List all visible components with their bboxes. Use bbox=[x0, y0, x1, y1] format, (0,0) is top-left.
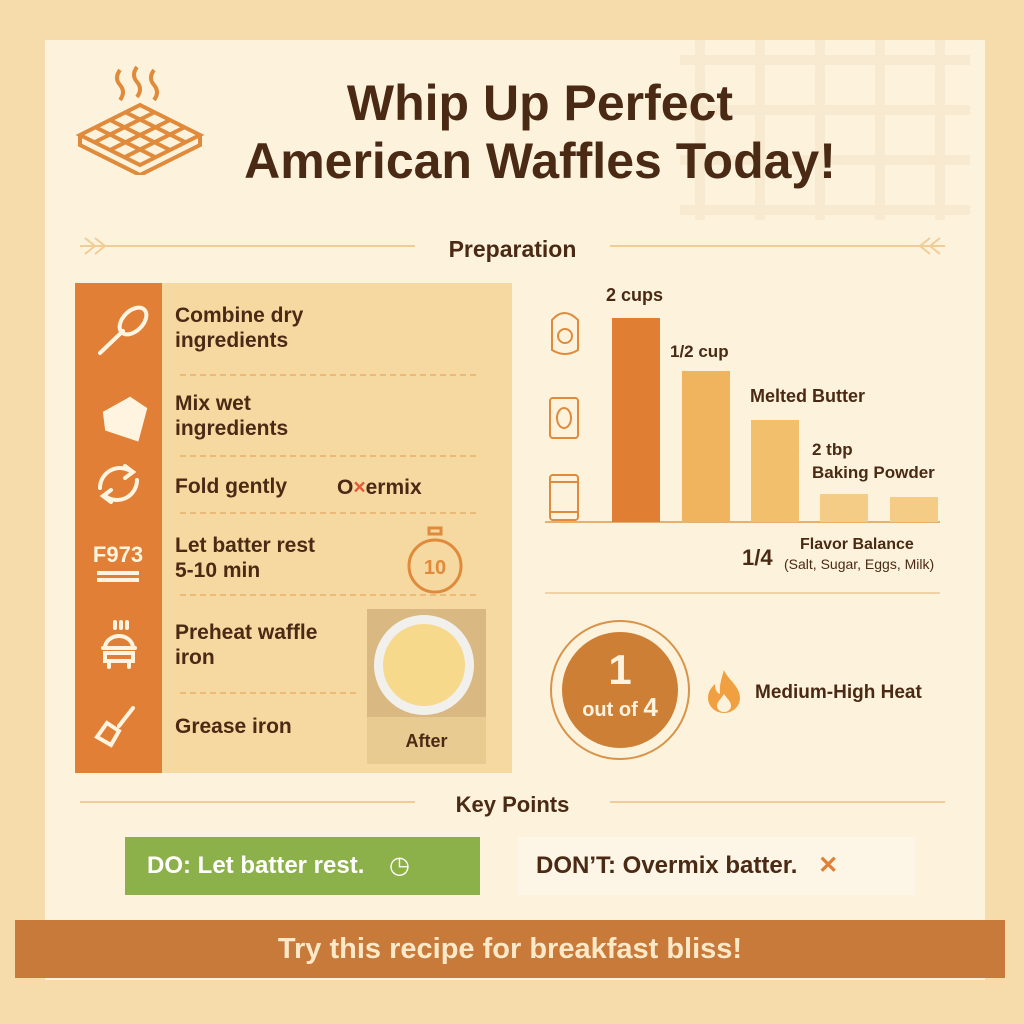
badge: 1 out of 4: 1 bbox=[608, 646, 632, 693]
panel: steps: 5-10 min bbox=[175, 559, 260, 582]
banner bbox=[15, 920, 1005, 978]
bar chart: Baking Powder bbox=[812, 463, 935, 482]
panel: steps: iron bbox=[175, 646, 215, 669]
icon: flame bbox=[708, 670, 740, 713]
panel: steps bbox=[75, 283, 512, 773]
divider arrow bbox=[545, 592, 940, 594]
banner: Try this recipe for breakfast bliss! bbox=[278, 933, 742, 965]
panel: steps: O×ermix bbox=[337, 476, 422, 499]
photo: batter bowl bbox=[367, 609, 486, 764]
icon: timer bbox=[408, 526, 462, 594]
bar chart: 1/2 cup bbox=[670, 342, 729, 361]
panel: steps: Mix wet bbox=[175, 392, 251, 415]
bar chart bbox=[545, 285, 940, 572]
title bbox=[244, 75, 836, 189]
badge: 1 out of 4 bbox=[550, 620, 690, 760]
panel: steps: Let batter rest bbox=[175, 534, 315, 557]
bar chart: (Salt, Sugar, Eggs, Milk) bbox=[784, 556, 934, 572]
step texts: ingredients bbox=[175, 329, 288, 352]
icon: waffle bbox=[76, 66, 204, 175]
badge: 1 out of 4: out of 4 bbox=[582, 692, 658, 722]
text: heat: Medium-High Heat bbox=[755, 682, 922, 703]
callout: DO: DO: Let batter rest. ◷ bbox=[147, 852, 410, 879]
photo: batter bowl: After bbox=[405, 731, 448, 751]
title: American Waffles Today! bbox=[244, 133, 836, 189]
bar chart: 2 tbp bbox=[812, 440, 853, 459]
heading: Key Points: Key Points bbox=[456, 792, 569, 817]
callout: DON'T: DON’T: Overmix batter. ✕ bbox=[536, 852, 838, 879]
bar chart: Flavor Balance bbox=[800, 536, 914, 553]
bar chart: 1/4 bbox=[742, 545, 773, 570]
step texts bbox=[175, 304, 304, 352]
waffle grid decoration bbox=[680, 40, 970, 220]
panel: steps: ingredients bbox=[175, 417, 288, 440]
panel: steps: Grease iron bbox=[175, 715, 292, 738]
bar chart: 2 cups bbox=[606, 285, 663, 305]
bar chart: Melted Butter bbox=[750, 386, 865, 406]
step texts: Combine dry bbox=[175, 304, 303, 327]
heading: Preparation: Preparation bbox=[449, 236, 576, 262]
step icons: F973 bbox=[93, 542, 143, 567]
panel: steps: Preheat waffle bbox=[175, 621, 317, 644]
step icons bbox=[93, 306, 148, 748]
title: Whip Up Perfect bbox=[347, 75, 733, 131]
callout: DON'T bbox=[518, 837, 915, 895]
heading: Preparation bbox=[80, 236, 945, 262]
callout: DO bbox=[125, 837, 480, 895]
panel: steps: Fold gently bbox=[175, 475, 287, 498]
icon: timer: 10 bbox=[424, 557, 446, 579]
dividers bbox=[180, 374, 476, 694]
